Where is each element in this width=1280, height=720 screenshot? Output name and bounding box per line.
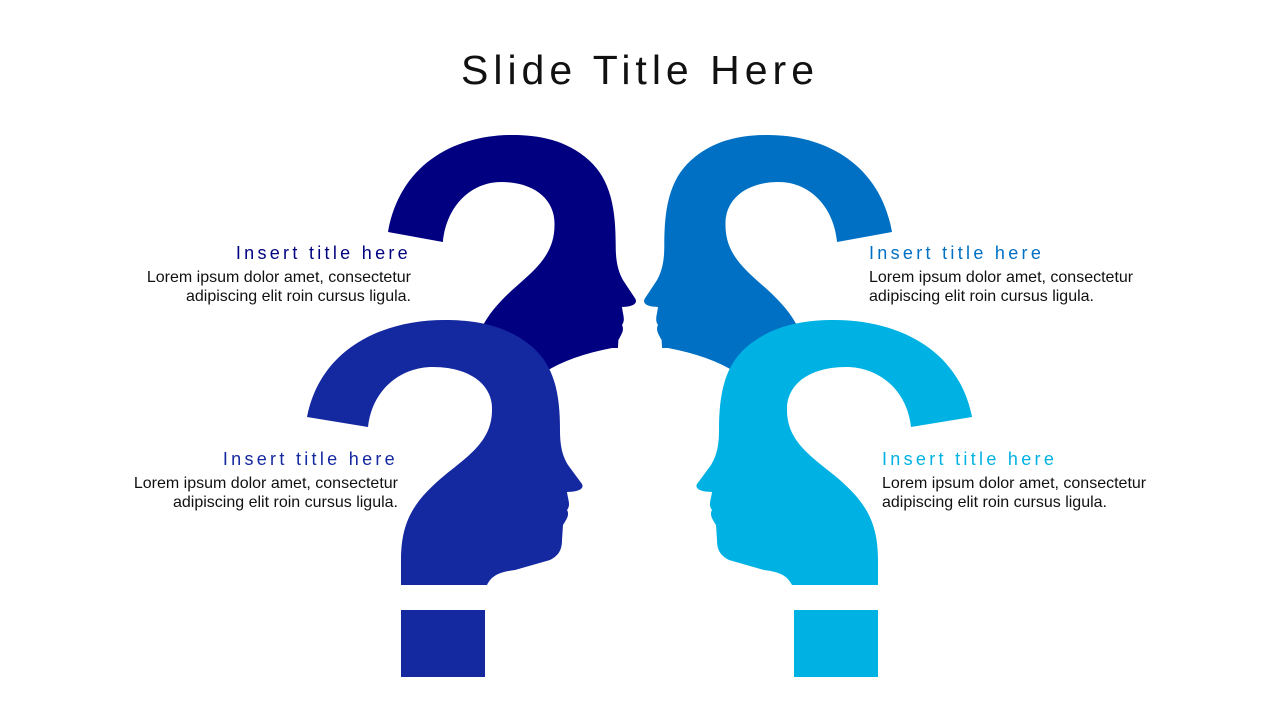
head: bottom-right [696, 320, 972, 677]
question-mark heads graphic [307, 135, 972, 677]
text: bottom-left: Insert title here [223, 449, 398, 469]
text: bottom-left: Lorem ipsum dolor amet, consectetur adipiscing elit roin cursus ligula. [134, 475, 398, 511]
text: top-left [147, 243, 411, 305]
text: top-left: Insert title here [236, 243, 411, 263]
text: top-right: Lorem ipsum dolor amet, consectetur adipiscing elit roin cursus ligula. [869, 269, 1133, 305]
text: top-right: Insert title here [869, 243, 1044, 263]
head: top-right [644, 135, 892, 369]
text: bottom-right [882, 449, 1146, 511]
text: bottom-left [134, 449, 398, 511]
head: top-left [388, 135, 636, 370]
head: bottom-left [307, 320, 583, 677]
text: top-left: Lorem ipsum dolor amet, consectetur adipiscing elit roin cursus ligula. [147, 269, 411, 305]
text: bottom-right: Insert title here [882, 449, 1057, 469]
title: Slide Title Here [461, 47, 819, 93]
text: bottom-right: Lorem ipsum dolor amet, consectetur adipiscing elit roin cursus ligula. [882, 475, 1146, 511]
text: top-right [869, 243, 1133, 305]
